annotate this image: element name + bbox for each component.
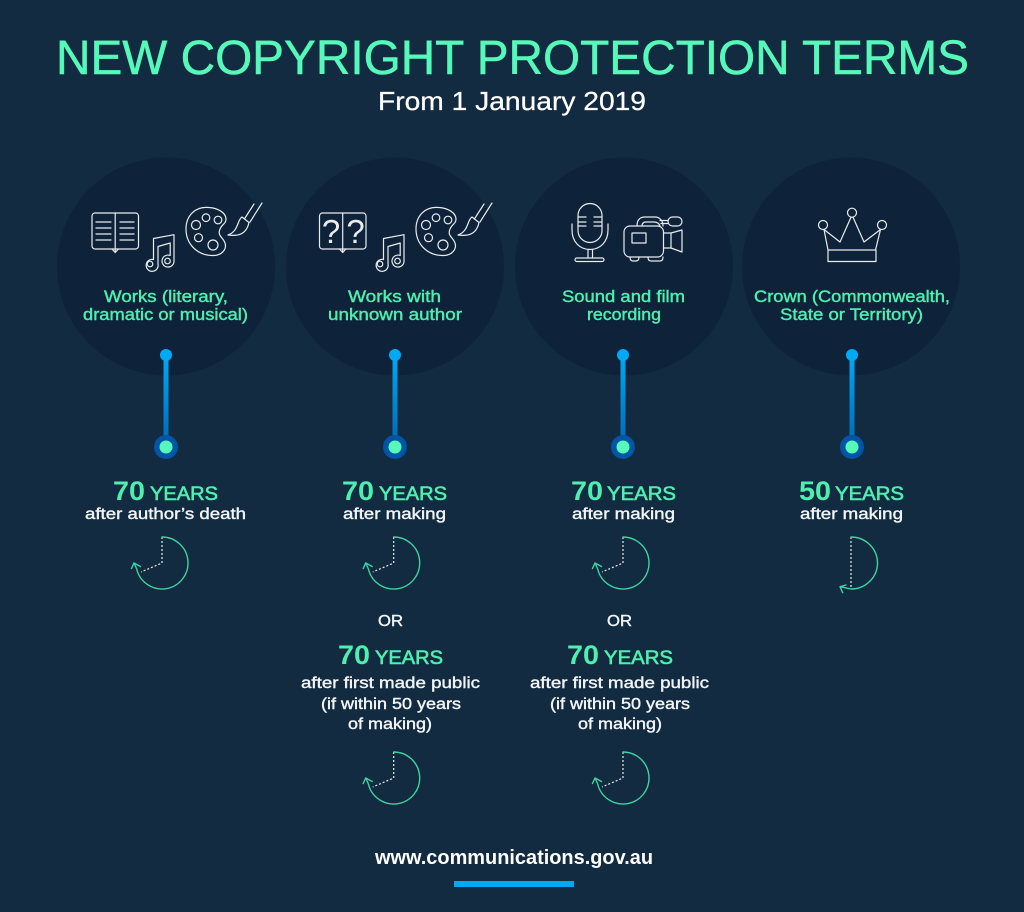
term: 70 years after making bbox=[571, 476, 676, 523]
term: 70 years after making: 70 bbox=[342, 476, 374, 506]
panel: unknown author bbox=[286, 158, 504, 804]
term: 70 years after making: YEARS bbox=[379, 484, 447, 505]
term: 70 years after first made public: of making) bbox=[348, 716, 432, 733]
connector bbox=[154, 349, 178, 459]
term: 70 years after making: 70 bbox=[571, 476, 603, 506]
term: 70 years: 70 bbox=[113, 476, 145, 506]
icon: music note bbox=[376, 235, 404, 271]
term: 70 years after making: after making bbox=[343, 506, 446, 523]
connector bbox=[611, 349, 635, 459]
term: 70 years: after author’s death bbox=[85, 506, 246, 523]
category label: Sound and film bbox=[562, 288, 685, 306]
icon: palette and brush bbox=[416, 203, 492, 256]
term: 50 years after making: 50 bbox=[799, 476, 831, 506]
term: 70 years after first made public bbox=[301, 640, 480, 733]
icon: book with question marks: ? bbox=[322, 213, 340, 250]
icon: clock bbox=[363, 537, 420, 589]
or divider: OR bbox=[378, 613, 403, 630]
term: 70 years after first made public: after first made public bbox=[301, 675, 480, 692]
icon: half clock bbox=[840, 537, 878, 593]
term: 70 years after making bbox=[342, 476, 447, 523]
category label: Crown (Commonwealth, bbox=[754, 288, 950, 306]
term: 70 years after first made public: YEARS bbox=[375, 648, 443, 669]
icon: book with question marks: ? bbox=[346, 213, 365, 250]
term: 70 years after first made public: 70 bbox=[567, 640, 599, 670]
category label bbox=[754, 288, 950, 324]
footer accent bar bbox=[454, 881, 574, 887]
category label: Works with bbox=[348, 288, 441, 306]
term: 50 years after making: YEARS bbox=[835, 484, 904, 505]
connector bbox=[383, 349, 407, 459]
or divider: OR bbox=[607, 613, 632, 630]
term: 70 years: YEARS bbox=[150, 484, 218, 505]
icon: open book bbox=[92, 213, 138, 252]
term: 70 years after first made public bbox=[530, 640, 709, 733]
icon: clock bbox=[363, 752, 420, 804]
category label: State or Territory) bbox=[780, 306, 923, 324]
category label: Works (literary, bbox=[104, 288, 228, 306]
panel: works bbox=[57, 158, 275, 589]
category label: recording bbox=[587, 306, 661, 324]
icon: crown bbox=[818, 208, 886, 262]
term: 70 years after making: YEARS bbox=[607, 484, 676, 505]
category label: unknown author bbox=[328, 306, 463, 324]
footer url: www.communications.gov.au bbox=[374, 847, 653, 869]
term: 70 years after making: after making bbox=[572, 506, 675, 523]
term: 70 years after first made public: after first made public bbox=[530, 675, 709, 692]
term: 70 years after first made public: (if within 50 years bbox=[550, 696, 690, 713]
term: 50 years after making bbox=[799, 476, 904, 523]
category circle bbox=[515, 158, 733, 376]
category circle bbox=[57, 158, 275, 376]
term: 70 years after first made public: 70 bbox=[338, 640, 370, 670]
panel: sound and film bbox=[515, 158, 733, 804]
icon: video camera bbox=[624, 217, 682, 261]
category label bbox=[328, 288, 463, 324]
term: 70 years after first made public: (if within 50 years bbox=[321, 696, 461, 713]
subtitle: From 1 January 2019 bbox=[378, 86, 646, 116]
category label: dramatic or musical) bbox=[83, 306, 248, 324]
category label bbox=[83, 288, 248, 324]
panel: crown bbox=[742, 158, 960, 593]
category circle bbox=[742, 158, 960, 376]
title: NEW COPYRIGHT PROTECTION TERMS bbox=[56, 32, 969, 85]
icon: clock bbox=[592, 537, 649, 589]
term: 70 years after first made public: of making) bbox=[578, 716, 662, 733]
icon: music note bbox=[146, 235, 174, 271]
term: 50 years after making: after making bbox=[800, 506, 903, 523]
icon: clock bbox=[592, 752, 649, 804]
term: 70 years bbox=[85, 476, 246, 523]
icon: book with question marks bbox=[320, 213, 366, 252]
icon: clock bbox=[132, 537, 188, 589]
icon: microphone bbox=[572, 204, 608, 262]
term: 70 years after first made public: YEARS bbox=[604, 648, 673, 669]
category label bbox=[562, 288, 685, 324]
connector bbox=[840, 349, 864, 459]
icon: palette and brush bbox=[186, 203, 262, 256]
category circle bbox=[286, 158, 504, 376]
